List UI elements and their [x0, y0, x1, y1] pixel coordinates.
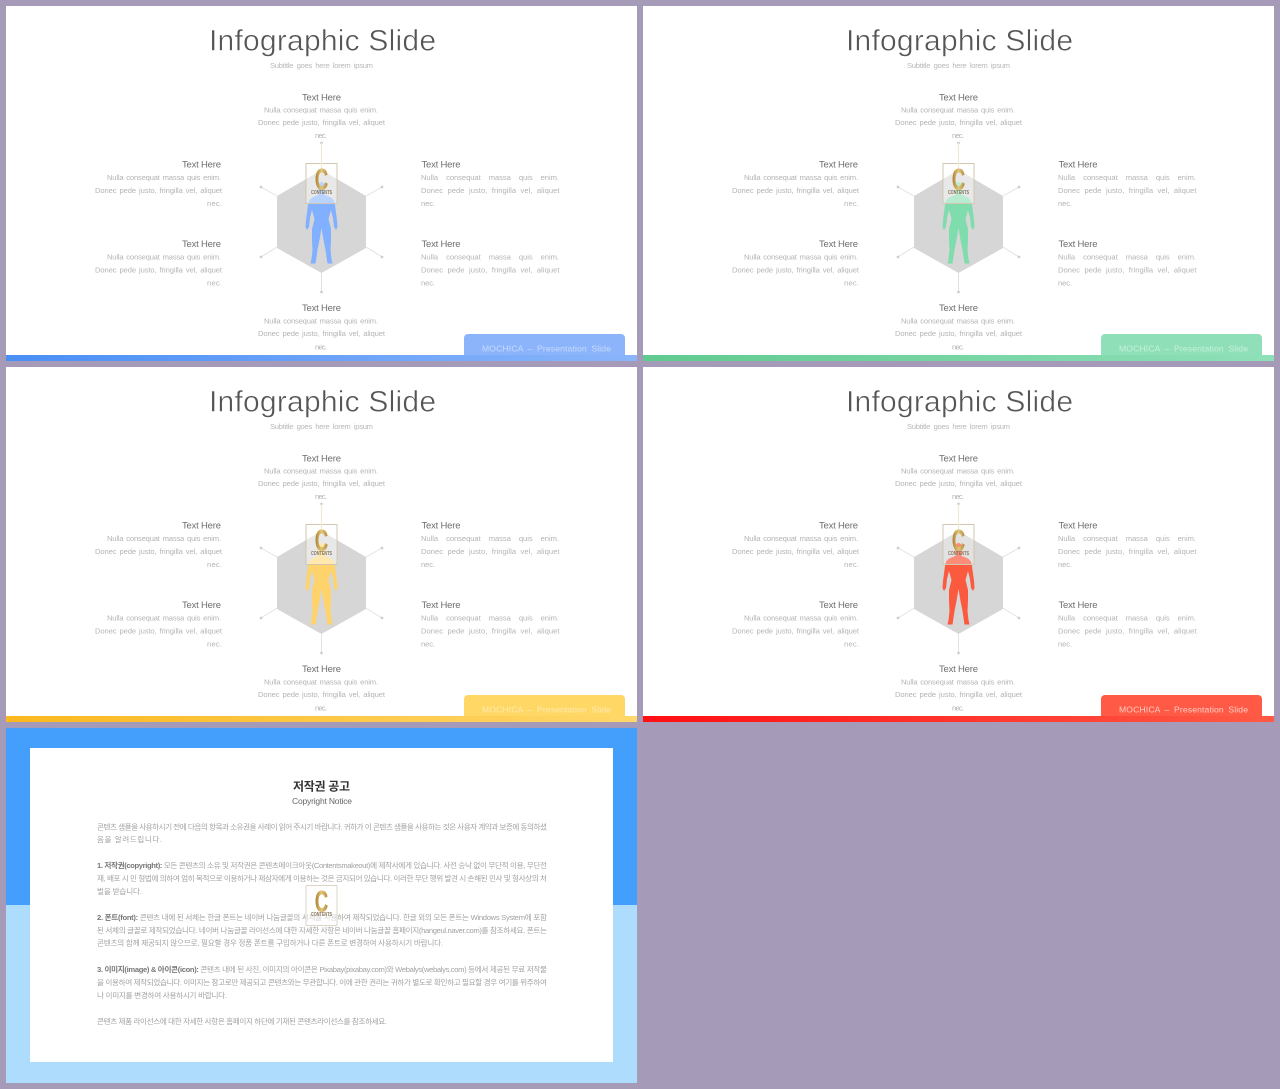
text block: upper left	[95, 160, 223, 208]
footer tab	[1101, 334, 1262, 355]
text block: upper left: Text Here	[819, 160, 858, 170]
text block: upper left	[95, 520, 223, 569]
heading: copyright notice: 저작권 공고	[293, 778, 350, 794]
text block: top: Text Here	[302, 92, 341, 104]
paragraph: font: 콘텐츠의 함께 제공되지 않으므로, 필요할 경우 정품 폰트를 구입하거나 다른 폰트로 변경하여 사용하시기 바랍니다.	[97, 938, 443, 948]
text block: lower right: Donec pede justo, fringilla vel, aliquet	[421, 626, 560, 636]
text block: top: Donec pede justo, fringilla vel, aliquet	[895, 118, 1023, 127]
text block: lower right	[421, 239, 560, 288]
text block: bottom	[258, 664, 386, 712]
text block: upper right: Donec pede justo, fringilla vel, aliquet	[421, 186, 560, 195]
heading: copyright notice	[292, 778, 352, 806]
intro paragraph	[97, 822, 547, 844]
text block: bottom: Nulla consequat massa quis enim.	[264, 678, 378, 686]
hexagon	[277, 531, 366, 634]
logo watermark: C	[315, 886, 328, 918]
logo watermark: C	[315, 164, 328, 196]
text block: top: Nulla consequat massa quis enim.	[264, 106, 378, 114]
text block: bottom: nec.	[315, 342, 327, 352]
text block: lower right	[1058, 600, 1197, 648]
text block: bottom	[895, 303, 1023, 352]
text block: bottom: Nulla consequat massa quis enim.	[264, 316, 378, 326]
text block: bottom: Text Here	[302, 664, 341, 675]
text block: top: Nulla consequat massa quis enim.	[901, 466, 1015, 476]
text block: lower right: Nulla consequat massa quis enim.	[421, 614, 559, 622]
text block: upper left: Text Here	[819, 520, 858, 532]
footer bar	[643, 716, 1274, 722]
text block: lower left: Text Here	[819, 239, 858, 250]
paragraph: image and icon: 을 이용하여 제작되었습니다. 이미지는 참고로만 제공되고 콘텐츠와는 무관합니다. 이에 관한 권리는 귀하가 별도로 확인하고 필요할 경우 여기를 위주하여	[97, 977, 547, 987]
white card	[30, 748, 613, 1062]
text block: lower left: Donec pede justo, fringilla vel, aliquet	[95, 626, 223, 636]
text block: upper right: Donec pede justo, fringilla vel, aliquet	[1058, 186, 1197, 195]
title: Infographic Slide	[209, 24, 436, 58]
text block: top: Nulla consequat massa quis enim.	[264, 466, 378, 476]
text block: lower right: Donec pede justo, fringilla vel, aliquet	[421, 266, 560, 274]
paragraph: copyright	[97, 860, 547, 896]
text block: lower right: Text Here	[422, 239, 460, 250]
text block: upper right	[1058, 520, 1197, 569]
human figure	[306, 543, 338, 624]
text block: top: nec.	[315, 131, 327, 140]
text block: upper right: Donec pede justo, fringilla vel, aliquet	[1058, 547, 1197, 556]
text block: upper right: nec.	[1058, 560, 1072, 569]
logo watermark: CONTENTS	[311, 551, 333, 557]
radial arrows	[897, 503, 1020, 654]
logo watermark: C	[952, 524, 965, 558]
text block: bottom: Text Here	[939, 664, 978, 675]
text block: lower left: nec.	[207, 640, 222, 648]
footer tab: MOCHICA – Presentation Slide	[482, 704, 611, 714]
text block: top: nec.	[952, 492, 964, 501]
hexagon	[914, 531, 1003, 634]
text block: bottom: nec.	[952, 704, 964, 712]
paragraph: image and icon: 3. 이미지(image) & 아이콘(icon): 콘텐츠 내에 된 사진, 이미지의 아이콘은 Pixabay(pixabay.com)와 Webalys(webalys.com) 등에서 제공된 무료 저작물	[97, 964, 547, 974]
text block: upper right	[421, 520, 560, 569]
text block: upper right: Text Here	[422, 520, 460, 532]
text block: upper left: nec.	[844, 560, 859, 569]
text block: upper left: nec.	[207, 560, 222, 569]
text block: upper right	[1058, 160, 1197, 208]
text block: bottom: Nulla consequat massa quis enim.	[901, 678, 1015, 686]
radial arrows	[260, 142, 383, 293]
footer bar	[643, 355, 1274, 361]
text block: lower left	[95, 239, 223, 288]
text block: upper right: Nulla consequat massa quis enim.	[421, 173, 559, 182]
text block: top: Text Here	[939, 454, 978, 464]
text block: upper left: Nulla consequat massa quis enim.	[744, 534, 858, 543]
text block: bottom	[258, 303, 386, 352]
text block: lower left: Nulla consequat massa quis enim.	[744, 614, 858, 622]
human figure	[306, 182, 338, 264]
text block: upper left: Text Here	[182, 160, 221, 170]
text block: bottom: Nulla consequat massa quis enim.	[901, 316, 1015, 326]
text block: bottom: nec.	[952, 342, 964, 352]
logo watermark	[306, 886, 337, 926]
logo watermark	[306, 504, 337, 564]
text block: top: Donec pede justo, fringilla vel, aliquet	[258, 479, 386, 488]
subtitle: Subtitle goes here lorem ipsum	[270, 61, 373, 70]
paragraph: font: 된 서체의 글꼴로 제작되었습니다. 네이버 나눔글꼴 라이선스에 대한 자세한 사항은 네이버 나눔글꼴 홈페이지(hangeul.naver.com)를 참조하세요. 폰트는	[97, 925, 547, 935]
text block: upper left: Text Here	[182, 520, 221, 532]
text block: lower right: Nulla consequat massa quis enim.	[1058, 252, 1196, 262]
text block: top	[258, 454, 386, 501]
title: Infographic Slide	[846, 24, 1073, 58]
text block: lower left	[732, 600, 860, 648]
intro paragraph: 음을 알려드립니다.	[97, 834, 162, 844]
text block: upper right: Donec pede justo, fringilla vel, aliquet	[421, 547, 560, 556]
text block: lower left: Nulla consequat massa quis enim.	[107, 614, 221, 622]
text block: upper left: Nulla consequat massa quis enim.	[107, 534, 221, 543]
background light blue band	[6, 905, 637, 1083]
paragraph: font	[97, 912, 547, 948]
text block: upper left: Donec pede justo, fringilla vel, aliquet	[95, 547, 223, 556]
paragraph: copyright: 1. 저작권(copyright): 모든 콘텐츠의 소유 및 저작권은 콘텐츠메이크아웃(Contentsmakeout)에 제작사에게 있습니다. 사전 승낙 없이 무단적 이용, 무단전	[97, 860, 547, 870]
text block: upper left: Donec pede justo, fringilla vel, aliquet	[732, 547, 860, 556]
text block: lower right: nec.	[1058, 278, 1072, 288]
text block: lower right: Nulla consequat massa quis enim.	[421, 252, 559, 262]
text block: lower left: nec.	[207, 278, 222, 288]
text block: lower right: Nulla consequat massa quis enim.	[1058, 614, 1196, 622]
subtitle: Subtitle goes here lorem ipsum	[907, 422, 1010, 431]
text block: upper right: nec.	[421, 199, 435, 208]
text block: bottom: nec.	[315, 704, 327, 712]
intro paragraph: 콘텐츠 샘플을 사용하시기 전에 다음의 항목과 소유권을 사례이 읽어 주시기 바랍니다. 귀하가 이 콘텐츠 샘플을 사용하는 것은 사용자 계약과 보증에 동의하셨	[97, 822, 547, 832]
text block: lower left: Nulla consequat massa quis enim.	[107, 252, 221, 262]
text block: upper right: Nulla consequat massa quis enim.	[1058, 534, 1196, 543]
hexagon	[277, 170, 366, 273]
text block: upper right: Nulla consequat massa quis enim.	[1058, 173, 1196, 182]
text block: top	[258, 92, 386, 140]
logo watermark: CONTENTS	[311, 190, 333, 196]
logo watermark	[306, 143, 337, 204]
text block: bottom: Donec pede justo, fringilla vel, aliquet	[258, 690, 386, 699]
hexagon	[914, 170, 1003, 273]
paragraph: image and icon: 나 이미지를 변경하여 사용하시기 바랍니다.	[97, 990, 227, 1000]
footer tab	[1101, 695, 1262, 716]
text block: lower right: Text Here	[1058, 600, 1098, 611]
text block: lower right: nec.	[421, 640, 435, 648]
text block: upper right: nec.	[421, 560, 435, 569]
text block: lower right: Donec pede justo, fringilla vel, aliquet	[1058, 626, 1197, 636]
text block: upper right: Text Here	[422, 160, 460, 170]
footer tab	[464, 695, 625, 716]
paragraph: copyright: 재, 배포 시 민 형법에 의하여 엄히 목적으로 이용하거나 제삼자에게 이용하는 것은 금지되어 있습니다. 이러한 무단 행위 발견 시 손해된 민사 및 형사상의 처	[97, 873, 547, 883]
text block: bottom: Donec pede justo, fringilla vel, aliquet	[895, 690, 1023, 699]
radial arrows	[260, 503, 383, 654]
text block: lower right	[1058, 239, 1197, 288]
text block: lower right: Donec pede justo, fringilla vel, aliquet	[1058, 266, 1197, 274]
paragraph: image and icon	[97, 964, 547, 1000]
text block: top	[895, 454, 1023, 501]
text block: upper left: Nulla consequat massa quis enim.	[744, 173, 858, 182]
text block: upper left: nec.	[207, 199, 222, 208]
text block: upper right: Text Here	[1058, 160, 1098, 170]
text block: lower left: Donec pede justo, fringilla vel, aliquet	[95, 266, 223, 274]
paragraph: copyright: 벌을 받습니다.	[97, 886, 142, 896]
footer tab: MOCHICA – Presentation Slide	[1119, 344, 1248, 354]
text block: lower left: Text Here	[182, 239, 221, 250]
logo watermark	[943, 504, 974, 564]
text block: lower left: Donec pede justo, fringilla vel, aliquet	[732, 626, 860, 636]
radial arrows	[897, 142, 1020, 293]
title: Infographic Slide	[846, 386, 1073, 418]
text block: lower left: nec.	[844, 640, 859, 648]
text block: upper left: Donec pede justo, fringilla vel, aliquet	[732, 186, 860, 195]
text block: lower right: nec.	[421, 278, 435, 288]
logo watermark: C	[315, 524, 328, 558]
text block: lower left: Text Here	[182, 600, 221, 611]
human figure	[942, 182, 974, 264]
text block: lower left: nec.	[844, 278, 859, 288]
footer tab: MOCHICA – Presentation Slide	[482, 344, 611, 354]
text block: bottom: Text Here	[302, 303, 341, 314]
text block: upper right: Nulla consequat massa quis enim.	[421, 534, 559, 543]
text block: lower left: Donec pede justo, fringilla vel, aliquet	[732, 266, 860, 274]
text block: upper left: nec.	[844, 199, 859, 208]
panel: green slide	[643, 6, 1274, 361]
footer tab	[464, 334, 625, 355]
text block: upper right: Text Here	[1058, 520, 1098, 532]
human figure	[942, 543, 974, 624]
footer bar	[6, 355, 637, 361]
text block: upper left	[732, 520, 860, 569]
text block: lower left	[95, 600, 223, 648]
text block: top: nec.	[315, 492, 327, 501]
text block: upper right	[421, 160, 560, 208]
text block: upper left: Nulla consequat massa quis enim.	[107, 173, 221, 182]
background blue band	[6, 728, 637, 905]
text block: bottom	[895, 664, 1023, 712]
panel: blue slide	[6, 6, 637, 361]
logo watermark: CONTENTS	[311, 912, 333, 918]
text block: bottom: Text Here	[939, 303, 978, 314]
text block: top: Text Here	[302, 454, 341, 464]
text block: upper left: Donec pede justo, fringilla vel, aliquet	[95, 186, 223, 195]
text block: lower right	[421, 600, 560, 648]
text block: lower left	[732, 239, 860, 288]
logo watermark: C	[952, 164, 965, 196]
footer tab: MOCHICA – Presentation Slide	[1119, 704, 1248, 714]
panel: red slide	[643, 367, 1274, 722]
text block: lower left: Nulla consequat massa quis enim.	[744, 252, 858, 262]
text block: lower right: nec.	[1058, 640, 1072, 648]
logo watermark	[943, 143, 974, 204]
text block: top: Text Here	[939, 92, 978, 104]
logo watermark: CONTENTS	[948, 551, 970, 557]
title: Infographic Slide	[209, 386, 436, 418]
text block: lower right: Text Here	[1058, 239, 1098, 250]
panel: copyright notice	[6, 728, 637, 1083]
text block: bottom: Donec pede justo, fringilla vel, aliquet	[258, 329, 386, 338]
text block: top: Donec pede justo, fringilla vel, aliquet	[258, 118, 386, 127]
panel: yellow slide	[6, 367, 637, 722]
text block: upper left	[732, 160, 860, 208]
subtitle: Subtitle goes here lorem ipsum	[907, 61, 1010, 70]
logo watermark: CONTENTS	[948, 190, 970, 196]
text block: lower right: Text Here	[422, 600, 460, 611]
text block: top: Nulla consequat massa quis enim.	[901, 106, 1015, 114]
paragraph: font: 2. 폰트(font): 콘텐츠 내에 된 서체는 한글 폰트는 네이버 나눔글꼴의 서체를 사용하여 제작되었습니다. 한글 외의 모든 폰트는 Windows System에 포함	[97, 912, 547, 922]
text block: upper right: nec.	[1058, 199, 1072, 208]
text block: top: Donec pede justo, fringilla vel, aliquet	[895, 479, 1023, 488]
text block: top	[895, 92, 1023, 140]
subtitle: Subtitle goes here lorem ipsum	[270, 422, 373, 431]
heading: copyright notice: Copyright Notice	[292, 796, 352, 806]
text block: lower left: Text Here	[819, 600, 858, 611]
text block: top: nec.	[952, 131, 964, 140]
closing note: 콘텐츠 제품 라이선스에 대한 자세한 사항은 홈페이지 하단에 기재된 콘텐츠라이선스를 참조하세요.	[97, 1016, 387, 1026]
footer bar	[6, 716, 637, 722]
text block: bottom: Donec pede justo, fringilla vel, aliquet	[895, 329, 1023, 338]
